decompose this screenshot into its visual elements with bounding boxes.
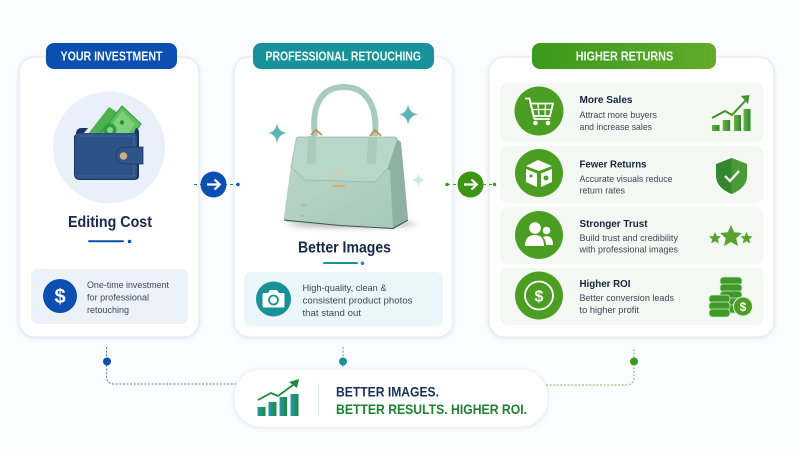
icon: coin stacks xyxy=(709,277,752,317)
underline accent xyxy=(323,262,364,265)
icon: dollar: $ xyxy=(54,286,66,308)
text: more sales: Attract more buyers xyxy=(580,110,657,121)
heading: editing cost: Editing Cost xyxy=(68,214,153,231)
icon: growth chart xyxy=(712,95,750,131)
text: fewer returns: Accurate visuals reduce xyxy=(580,174,672,185)
text: stronger trust: Stronger Trust xyxy=(580,218,648,230)
text: fewer returns xyxy=(580,158,672,196)
arrow: retouching to returns xyxy=(445,172,496,198)
text: fewer returns: return rates xyxy=(580,186,625,196)
text: tagline: BETTER IMAGES. xyxy=(336,384,439,400)
heading pill: higher returns: HIGHER RETURNS xyxy=(576,50,673,64)
heading pill: your investment: YOUR INVESTMENT xyxy=(60,50,163,64)
callout text: consistent product photos xyxy=(302,296,413,306)
row: more sales xyxy=(500,83,764,142)
callout: bottom summary xyxy=(234,369,548,427)
callout: one-time investment xyxy=(31,269,188,324)
text: higher roi: Better conversion leads xyxy=(580,293,674,304)
callout text: that stand out xyxy=(302,308,361,319)
callout text: retouching xyxy=(87,305,129,316)
illustration: handbag xyxy=(284,87,416,228)
icon: dollar coin xyxy=(515,272,563,320)
text: stronger trust: with professional images xyxy=(579,245,678,256)
connector dots xyxy=(103,358,638,366)
icon: wallet with cash xyxy=(53,92,165,204)
callout text xyxy=(302,283,413,319)
icon: sparkles xyxy=(268,104,424,187)
callout text: for professional xyxy=(87,292,149,304)
text: stronger trust xyxy=(579,218,678,256)
text: tagline xyxy=(336,384,527,417)
text: tagline: BETTER RESULTS. HIGHER ROI. xyxy=(336,401,527,417)
text: fewer returns: Fewer Returns xyxy=(580,158,647,170)
panel: your investment xyxy=(19,43,199,337)
callout: product photos xyxy=(244,272,443,326)
callout text: High-quality, clean & xyxy=(302,283,387,294)
heading pill: your investment xyxy=(46,43,177,69)
icon: growth chart xyxy=(258,379,299,416)
icon: dollar xyxy=(43,279,77,313)
icon: camera xyxy=(256,282,291,316)
icon: people xyxy=(515,211,563,259)
row: stronger trust xyxy=(500,207,764,264)
panel: professional retouching xyxy=(234,43,453,337)
text: stronger trust: Build trust and credibility xyxy=(580,233,678,244)
divider xyxy=(318,383,320,416)
text: more sales: and increase sales xyxy=(580,122,652,133)
text: more sales xyxy=(580,94,657,133)
icon: box xyxy=(515,149,563,197)
heading pill: higher returns xyxy=(532,43,716,69)
callout text: One-time investment xyxy=(87,280,169,291)
icon: dollar coin: $ xyxy=(535,288,544,306)
text: higher roi xyxy=(580,278,674,316)
text: higher roi: Higher ROI xyxy=(580,278,631,290)
heading pill: professional retouching xyxy=(253,43,434,69)
text: higher roi: to higher profit xyxy=(580,305,639,316)
icon: stars xyxy=(709,225,752,246)
icon: shopping cart xyxy=(514,86,564,136)
connector: bottom dotted lines xyxy=(106,347,634,385)
icon: shield check xyxy=(716,158,747,194)
row: fewer returns xyxy=(500,146,764,203)
underline accent xyxy=(88,240,131,243)
icon: coin stacks: $ xyxy=(740,300,747,314)
callout text xyxy=(87,280,169,316)
text: more sales: More Sales xyxy=(580,94,633,106)
row: higher roi xyxy=(500,268,764,325)
panel: higher returns xyxy=(489,43,774,337)
arrow: investment to retouching xyxy=(194,172,240,198)
heading: better images: Better Images xyxy=(298,240,391,256)
heading pill: professional retouching: PROFESSIONAL RETOUCHING xyxy=(266,50,421,64)
